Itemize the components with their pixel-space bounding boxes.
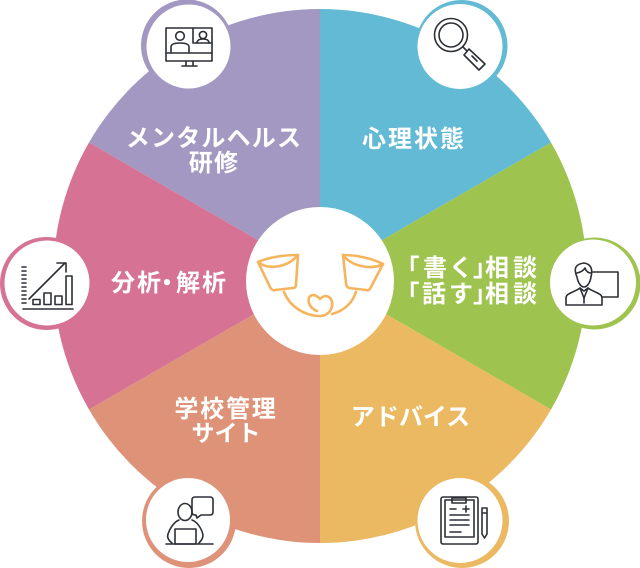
badge: clipboard and pencil (415, 474, 509, 568)
label: writing and talking consultation: 「話す」相談 (396, 281, 537, 308)
label: analysis and interpretation: 分析・解析 (111, 270, 226, 297)
wedge: psychological state (320, 9, 551, 276)
badge: magnifying glass (416, 0, 508, 92)
label: advice: アドバイス (351, 404, 470, 431)
wedge: mental health training (89, 9, 320, 276)
label: mental health training: 研修 (189, 150, 239, 177)
badge: video call monitor (141, 0, 233, 92)
wedge: advice (320, 276, 551, 543)
label: mental health training: メンタルヘルス (126, 125, 302, 152)
label: psychological state: 心理状態 (362, 126, 466, 153)
badge: teacher with board (548, 238, 640, 330)
center circle with paper cup phone logo (246, 207, 394, 355)
badge: person at laptop with speech bubble (142, 474, 236, 568)
badge: rising bar chart (0, 237, 93, 330)
wedge: analysis (53, 142, 320, 410)
label: school management site: 学校管理 (174, 396, 278, 423)
wedge: school management site (89, 276, 320, 543)
wedge: writing and talking consultation (320, 142, 587, 410)
label: writing and talking consultation: 「書く」相談 (396, 255, 537, 282)
label: school management site: サイト (192, 420, 260, 446)
